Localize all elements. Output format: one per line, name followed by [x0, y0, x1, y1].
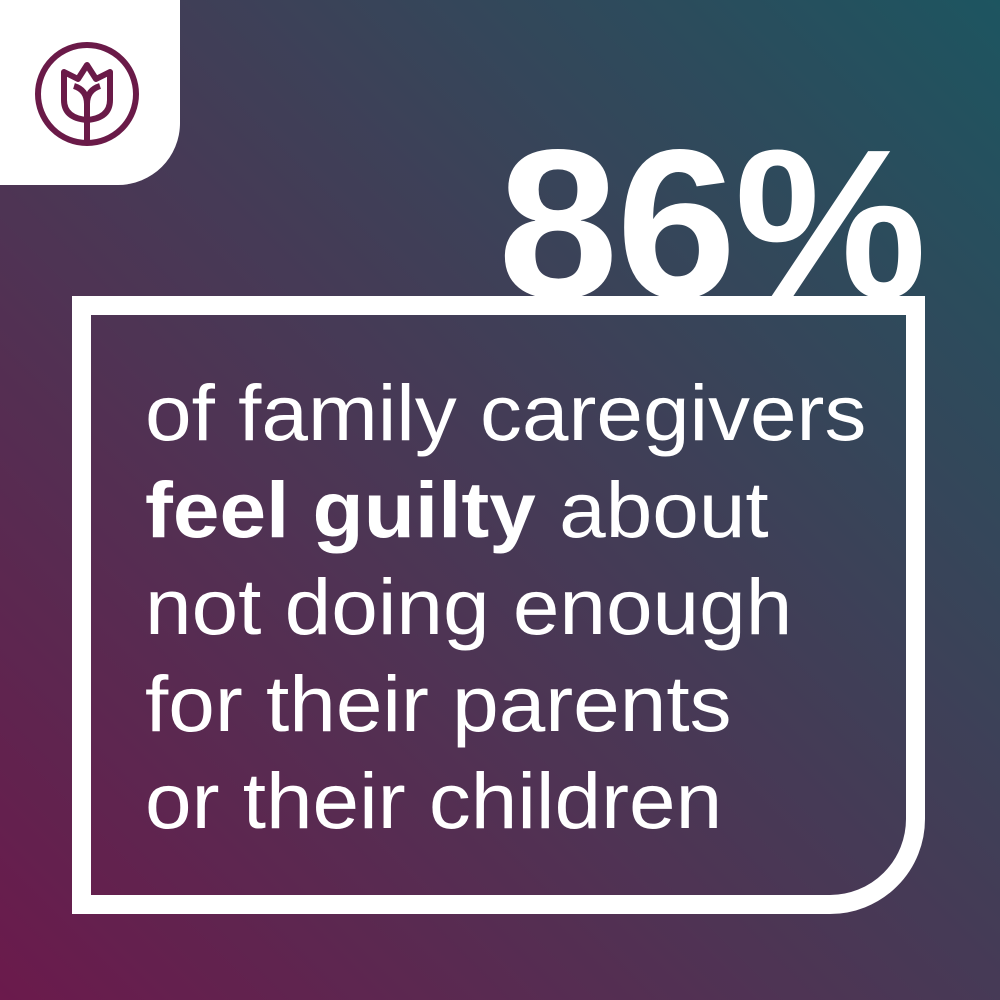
body text: of family caregivers [145, 368, 866, 457]
icon: tulip logo [35, 42, 139, 146]
body text: not doing enough [145, 562, 792, 651]
body text: or their children [145, 756, 722, 845]
frame [72, 296, 925, 914]
body text: feel guilty about [145, 465, 769, 554]
logo panel [0, 0, 180, 185]
big statistic: 86% [498, 105, 925, 342]
body text [145, 368, 866, 845]
body text: for their parents [145, 659, 731, 748]
